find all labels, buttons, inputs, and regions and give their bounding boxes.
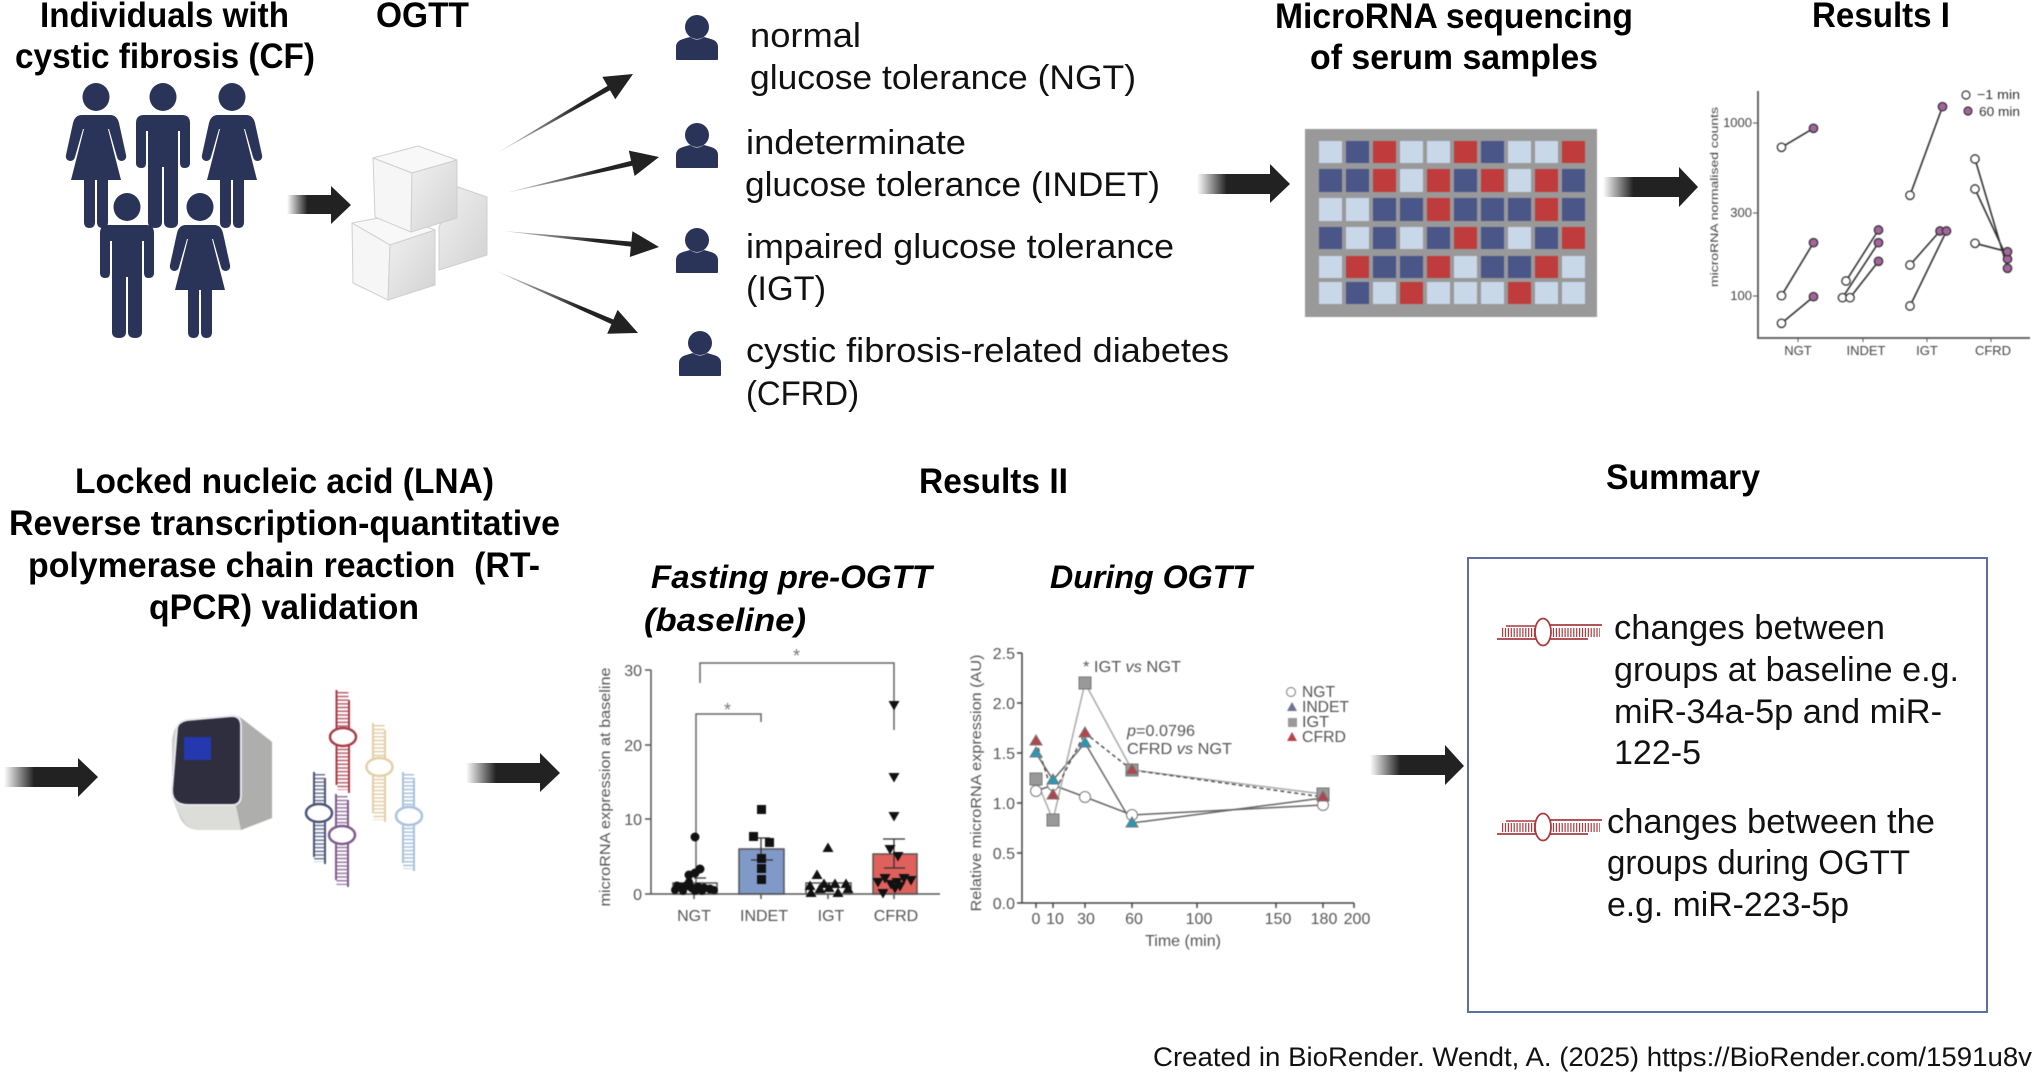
- icon: person INDET: [676, 123, 718, 168]
- axis labels: INDET: [740, 908, 788, 925]
- bars: [673, 849, 917, 894]
- axis labels: IGT: [818, 908, 845, 925]
- arrow: results II to summary: [1370, 745, 1464, 785]
- arrow: OGTT to CFRD: [494, 270, 638, 334]
- axis labels: 1.5: [993, 746, 1015, 763]
- axis labels: Time (min): [1145, 933, 1221, 950]
- text: baseline changes: [1614, 609, 1959, 772]
- icon: person CFRD: [679, 331, 721, 376]
- axis labels: 30: [1077, 911, 1095, 928]
- legend: OGTT lines: IGT: [1302, 714, 1329, 731]
- chart: baseline bar chart: [597, 646, 940, 925]
- text: baseline changes: changes between: [1614, 609, 1885, 647]
- axis labels: NGT: [677, 908, 711, 925]
- legend: results I: −1 min: [1977, 87, 2020, 102]
- chart: results I paired dot plot: INDET: [1846, 343, 1886, 358]
- chart: expression during OGTT line chart: [968, 646, 1370, 950]
- axis labels: 2.5: [993, 646, 1015, 663]
- strand: purple: [329, 794, 355, 887]
- axis labels: 200: [1344, 911, 1370, 928]
- text: INDET: [745, 124, 1160, 204]
- axis labels: 0.0: [993, 896, 1015, 913]
- series markers: [1030, 677, 1329, 827]
- text: baseline changes: 122-5: [1614, 734, 1701, 772]
- legend: OGTT lines: CFRD: [1302, 729, 1346, 746]
- strand: navy: [306, 772, 332, 864]
- chart: results I paired dot plot: IGT: [1916, 343, 1938, 358]
- icon: person IGT: [676, 228, 718, 273]
- text: NGT: [750, 17, 1136, 97]
- chart: results I paired dot plot: 1000: [1723, 115, 1752, 130]
- text: OGTT changes: changes between the: [1607, 803, 1935, 841]
- icon: miRNA top: [1497, 618, 1602, 646]
- heading: MicroRNA sequencing: of serum samples: [1310, 38, 1598, 77]
- arrow: OGTT to INDET: [505, 151, 659, 193]
- series lines: [1036, 683, 1323, 823]
- heading: MicroRNA sequencing: [1275, 0, 1633, 77]
- legend: results I: [1962, 87, 2020, 119]
- subheading: fasting pre-OGTT: (baseline): [644, 602, 806, 638]
- legend: OGTT lines: INDET: [1302, 699, 1349, 716]
- icon: miRNA bottom: [1497, 814, 1602, 840]
- axis labels: 0: [1032, 911, 1041, 928]
- chart: results I paired dot plot: 100: [1730, 288, 1752, 303]
- text: CFRD: cystic fibrosis-related diabetes: [746, 332, 1229, 370]
- chart: baseline bar chart: *: [793, 646, 800, 666]
- arrow: sequencing to results I: [1603, 167, 1698, 207]
- strand: tan: [366, 723, 392, 822]
- icon: sugar cubes: [352, 146, 487, 300]
- legend: results I: 60 min: [1979, 104, 2020, 119]
- axis labels: 10: [624, 812, 642, 829]
- heading: individuals with cystic fibrosis: [15, 0, 315, 76]
- text: INDET: indeterminate: [746, 124, 966, 162]
- heading: LNA RT-qPCR validation: polymerase chain reaction (RT-: [28, 546, 540, 585]
- text: CFRD: (CFRD): [746, 375, 859, 413]
- axis labels: microRNA expression at baseline: [597, 668, 614, 906]
- heading: LNA RT-qPCR validation: Locked nucleic acid (LNA): [75, 462, 494, 501]
- subheading: fasting pre-OGTT: [644, 559, 935, 638]
- text: INDET: glucose tolerance (INDET): [745, 166, 1160, 204]
- arrow: into qPCR: [4, 758, 98, 797]
- annotations: CFRD vs NGT: [1127, 741, 1232, 758]
- axis labels: 20: [624, 738, 642, 755]
- chart: results I paired dot plot: CFRD: [1975, 343, 2011, 358]
- text: baseline changes: groups at baseline e.g.: [1614, 651, 1959, 689]
- axis labels: 0: [633, 887, 642, 904]
- annotations: * IGT vs NGT: [1083, 659, 1181, 676]
- heading: LNA RT-qPCR validation: [9, 462, 560, 627]
- axis labels: [968, 646, 1370, 950]
- heading: Summary: Summary: [1606, 458, 1761, 497]
- strand: light blue: [396, 772, 422, 871]
- heading: LNA RT-qPCR validation: qPCR) validation: [149, 588, 419, 627]
- legend: OGTT lines: [1286, 684, 1349, 746]
- icon: qPCR machine: [172, 715, 272, 830]
- text: IGT: impaired glucose tolerance: [746, 228, 1174, 266]
- axis labels: 2.0: [993, 696, 1015, 713]
- text: OGTT changes: e.g. miR-223-5p: [1607, 886, 1849, 924]
- axis labels: [597, 663, 918, 925]
- axis labels: 60: [1125, 911, 1143, 928]
- chart: results I paired dot plot: 300: [1730, 205, 1752, 220]
- subheading: during OGTT: During OGTT: [1050, 559, 1254, 595]
- text: baseline changes: miR-34a-5p and miR-: [1614, 693, 1942, 731]
- chart: results I paired dot plot: microRNA normalised counts: [1709, 106, 1721, 287]
- text: IGT: [746, 228, 1174, 308]
- axis labels: 100: [1186, 911, 1212, 928]
- data points: [671, 701, 916, 898]
- arrow: qPCR to results II: [466, 753, 560, 792]
- significance brackets: [696, 663, 894, 883]
- arrow: groups to sequencing: [1197, 164, 1290, 203]
- chart: results I paired dot plot: NGT: [1784, 343, 1812, 358]
- axis labels: 150: [1265, 911, 1291, 928]
- text: NGT: normal: [750, 17, 861, 55]
- arrow: OGTT to NGT: [497, 74, 633, 153]
- axis labels: Relative microRNA expression (AU): [968, 654, 985, 912]
- axis labels: CFRD: [874, 908, 918, 925]
- axis labels: 1.0: [993, 796, 1015, 813]
- axis labels: 0.5: [993, 846, 1015, 863]
- text: OGTT changes: groups during OGTT: [1607, 844, 1910, 882]
- arrow: OGTT to IGT: [503, 231, 659, 257]
- heading: Results II: Results II: [919, 462, 1068, 501]
- panel: summary: [1468, 558, 1987, 1012]
- chart: results I paired dot plot: [1709, 87, 2030, 358]
- icon: group of people: [66, 83, 262, 338]
- text: OGTT changes: [1607, 803, 1935, 924]
- panel: glucose tolerance groups: [676, 15, 1229, 413]
- text: IGT: (IGT): [746, 270, 826, 308]
- heading: individuals with cystic fibrosis: cystic fibrosis (CF): [15, 37, 315, 76]
- text: CFRD: [746, 332, 1229, 413]
- footer: attribution: Created in BioRender. Wendt, A. (2025) https://BioRender.com/1591u8v: [1153, 1042, 2032, 1072]
- arrow: people to OGTT: [287, 186, 351, 224]
- annotations: p=0.0796: [1126, 723, 1195, 740]
- axis labels: 10: [1046, 911, 1064, 928]
- icon: person NGT: [676, 15, 718, 60]
- chart: sequencing heatmap: [1305, 129, 1597, 317]
- icon: RNA strands: [306, 690, 422, 887]
- axis labels: 30: [624, 663, 642, 680]
- strand: red: [330, 690, 356, 793]
- annotations: [1083, 659, 1232, 758]
- error bars: [694, 838, 905, 878]
- axis labels: 180: [1311, 911, 1337, 928]
- heading: LNA RT-qPCR validation: Reverse transcription-quantitative: [9, 504, 560, 543]
- subheading: fasting pre-OGTT: Fasting pre-OGTT: [651, 559, 935, 595]
- legend: OGTT lines: NGT: [1302, 684, 1335, 701]
- text: NGT: glucose tolerance (NGT): [750, 59, 1136, 97]
- chart: baseline bar chart: *: [724, 700, 731, 720]
